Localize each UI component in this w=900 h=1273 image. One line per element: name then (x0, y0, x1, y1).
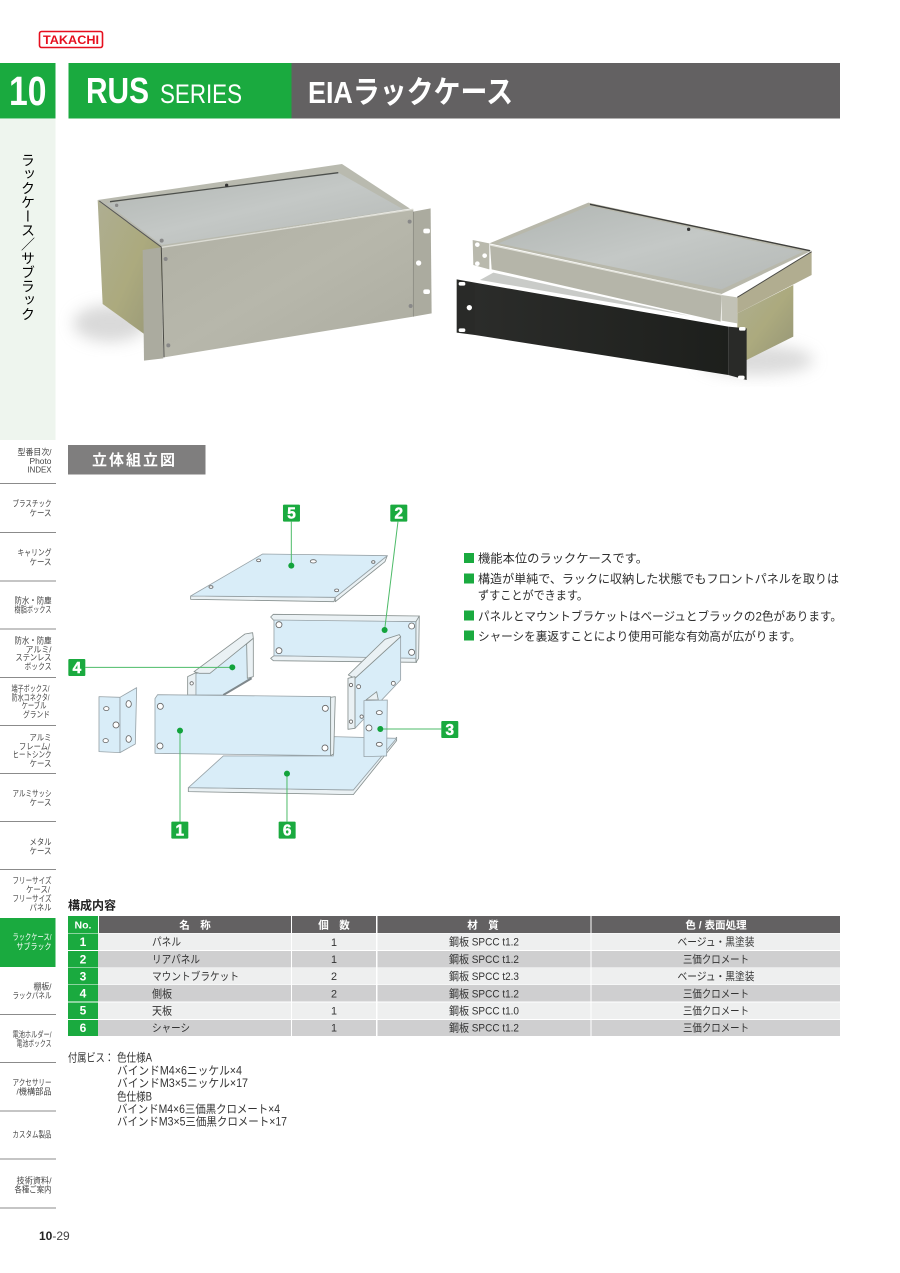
table header: 材 質 (467, 918, 499, 932)
note: included screws: 色仕様B (117, 1090, 152, 1104)
heading: exploded assembly diagram: 立体組立図 (92, 452, 177, 469)
sidebar: chapter title band (0, 119, 56, 440)
note: included screws: 付属ビス： (68, 1052, 114, 1064)
table header: 名 称 (179, 918, 211, 932)
note: included screws: バインドM4×6三価黒クロメート×4 (117, 1103, 281, 1116)
nav labels: 端子ボックス/ (12, 682, 50, 694)
heading: series banner (68, 63, 292, 118)
nav labels: 樹脂ボックス (14, 604, 52, 614)
feature list: シャーシを裏返すことにより使用可能な有効高が広がります。 (478, 628, 801, 644)
row 6: 鋼板 SPCC t1.2 (449, 1021, 519, 1035)
nav labels: ラックケース/ (12, 932, 52, 942)
feature list (464, 552, 842, 644)
part: left side plate 4 (188, 633, 253, 695)
part: right side plate (348, 635, 401, 729)
nav labels: ケース/ (26, 884, 51, 894)
nav labels: ケーブル (22, 700, 47, 710)
nav labels: カスタム製品 (12, 1128, 52, 1140)
sidebar navigation (0, 446, 56, 1208)
nav labels: 電池ホルダー/ (12, 1028, 52, 1040)
callout numbers: 2 (395, 506, 403, 523)
nav labels: サブラック (16, 940, 52, 952)
heading: components: 構成内容 (68, 898, 116, 912)
callout numbers: 6 (283, 823, 291, 840)
part: top plate 5 (191, 554, 387, 602)
row 1: 1 (331, 937, 337, 949)
feature list: ずすことができます。 (478, 588, 588, 602)
nav labels: ラックパネル (12, 990, 52, 1000)
nav labels: メタル (30, 837, 52, 847)
row 1: 1 (80, 935, 87, 949)
row 2 (68, 951, 840, 968)
nav labels: アルミ (30, 732, 52, 742)
row 3: 2 (331, 971, 337, 983)
nav labels: キャリング (18, 546, 52, 558)
row 3: 鋼板 SPCC t2.3 (449, 969, 519, 983)
callout numbers: 5 (287, 506, 296, 523)
nav labels: ケース (30, 557, 52, 567)
nav labels: ケース (30, 758, 52, 768)
page number: 10-29 (39, 1229, 70, 1243)
row 2: 鋼板 SPCC t1.2 (449, 952, 519, 966)
nav labels: パネル (30, 902, 52, 912)
row 5: 5 (80, 1004, 87, 1018)
column gaps (291, 916, 592, 1036)
heading: series banner: SERIES (160, 79, 242, 109)
row 2: 三価クロメート (683, 953, 749, 966)
nav labels: アクセサリー (12, 1078, 52, 1088)
logo: TAKACHI (40, 32, 102, 48)
row 4: 2 (331, 988, 337, 1000)
diagram: exploded assembly (68, 505, 458, 840)
row 5: 1 (331, 1005, 337, 1017)
nav labels: グランド (23, 708, 50, 720)
feature list: パネルとマウントブラケットはベージュとブラックの2色があります。 (478, 608, 842, 624)
nav labels: ケース (30, 846, 52, 856)
photo: large rack case (73, 164, 432, 361)
heading: exploded assembly diagram (68, 445, 206, 474)
row 1 (68, 934, 840, 950)
part: bracket 3 (364, 692, 387, 757)
nav labels: 棚板/ (34, 980, 52, 992)
row 6: 6 (80, 1021, 87, 1035)
part: chassis 6 (188, 737, 397, 795)
row 3 (68, 968, 840, 984)
nav labels: 防水・防塵 (14, 594, 52, 606)
nav labels: フリーサイズ (12, 874, 52, 886)
part: loose bracket (99, 688, 137, 753)
row 1: パネル (152, 936, 181, 948)
nav labels: プラスチック (12, 498, 52, 508)
row 2: 1 (331, 954, 337, 966)
row 4: 三価クロメート (683, 987, 749, 1000)
row 5: 鋼板 SPCC t1.0 (449, 1003, 519, 1017)
note: included screws: バインドM3×5三価黒クロメート×17 (117, 1116, 287, 1128)
callout numbers (68, 505, 458, 840)
row 5: 天板 (152, 1003, 172, 1017)
feature list: 構造が単純で、ラックに収納した状態でもフロントパネルを取りは (478, 571, 839, 586)
callout numbers: 4 (73, 660, 82, 677)
row 4: 4 (80, 986, 87, 1000)
part: front panel 1 (155, 695, 335, 756)
heading: product title (292, 63, 840, 118)
nav labels: 電池ボックス (16, 1038, 52, 1048)
row 4 (68, 985, 840, 1002)
note: included screws: バインドM4×6ニッケル×4 (117, 1064, 243, 1078)
nav labels: ヒートシンク (12, 750, 52, 760)
row 1: 鋼板 SPCC t1.2 (449, 934, 519, 948)
table header (68, 916, 840, 933)
photo: two low-profile rack cases (457, 203, 813, 380)
note: included screws: バインドM3×5ニッケル×17 (117, 1077, 248, 1090)
row 4: 鋼板 SPCC t1.2 (449, 986, 519, 1000)
leader lines (85, 522, 441, 822)
row 3: 3 (80, 969, 87, 983)
nav labels: ボックス (24, 662, 52, 672)
part: rear panel 2 (271, 614, 419, 662)
table: components (68, 916, 840, 1036)
row 6: 三価クロメート (683, 1022, 749, 1035)
nav labels: /機構部品 (16, 1086, 52, 1096)
nav labels: 技術資料/ (16, 1174, 52, 1186)
table header: No. (75, 920, 92, 932)
nav labels: 型番目次/ (18, 446, 52, 457)
callout numbers: 1 (176, 823, 185, 840)
nav labels: アルミ/ (26, 644, 52, 654)
note: included screws: 色仕様A (117, 1050, 152, 1064)
nav labels (12, 446, 52, 1194)
callout numbers: 3 (446, 722, 454, 739)
nav labels: 各種ご案内 (14, 1184, 52, 1194)
chapter number tab: 10 (9, 68, 46, 114)
nav labels: ケース (30, 508, 52, 518)
nav labels: INDEX (28, 464, 52, 474)
nav labels: Photo (30, 456, 52, 466)
row 6 (68, 1020, 840, 1036)
heading: series banner: RUS (86, 70, 149, 111)
row 3: マウントブラケット (152, 969, 239, 983)
sidebar: chapter title band: ラックケース／サブラック (18, 153, 38, 321)
nav labels: アルミサッシ (12, 788, 52, 798)
nav labels: 防水・防塵 (14, 634, 52, 646)
active nav highlight (0, 918, 56, 967)
row 2: リアパネル (152, 953, 200, 966)
logo: TAKACHI: TAKACHI (43, 35, 99, 47)
heading: product title: EIAラックケース (308, 75, 513, 110)
note: included screws (68, 1050, 287, 1128)
nav labels: 防水コネクタ/ (12, 692, 50, 702)
chapter number tab (0, 63, 56, 118)
row 1: ベージュ・黒塗装 (678, 936, 755, 948)
nav dividers (0, 484, 56, 1208)
row 5: 三価クロメート (683, 1004, 749, 1017)
row 2: 2 (80, 952, 87, 966)
row 6: シャーシ (152, 1023, 190, 1035)
nav labels: フレーム/ (19, 742, 51, 752)
row 6: 1 (331, 1023, 337, 1035)
nav labels: ステンレス (16, 652, 52, 662)
row 5 (68, 1002, 840, 1019)
nav labels: ケース (30, 798, 52, 808)
feature list: 機能本位のラックケースです。 (478, 552, 648, 566)
table header: 個 数 (318, 918, 350, 932)
row 3: ベージュ・黒塗装 (678, 970, 755, 983)
row 4: 側板 (152, 986, 172, 1000)
table header: 色 / 表面処理 (685, 918, 747, 932)
nav labels: フリーサイズ (12, 892, 52, 904)
